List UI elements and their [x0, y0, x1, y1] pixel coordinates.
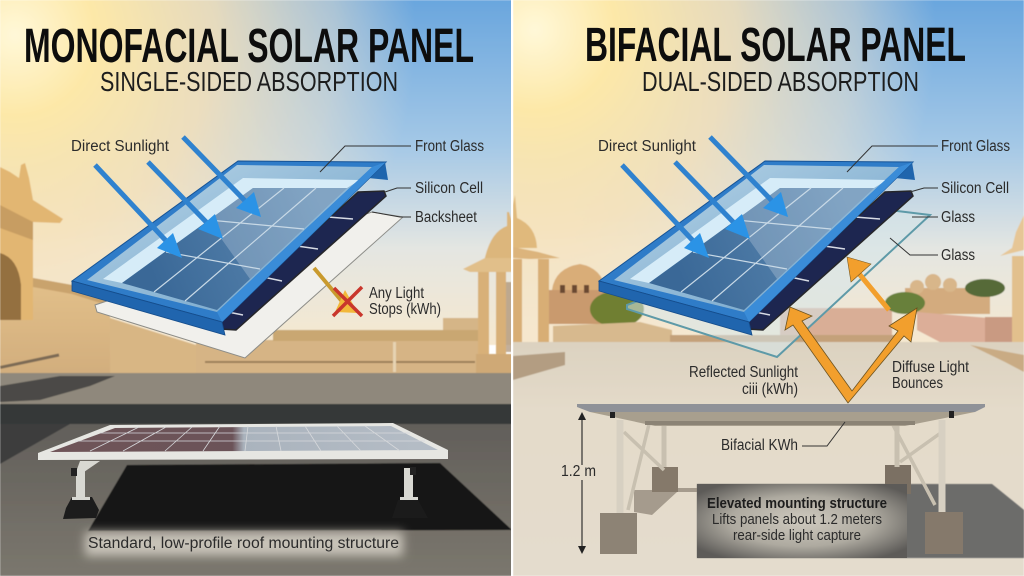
panel: monofacial background scene: [0, 0, 512, 576]
raised structure: bifacial: [577, 404, 985, 554]
label: backsheet: Backsheet: [415, 209, 478, 226]
callout: elevated mounting structure: [697, 484, 907, 558]
callout: standard mounting: [85, 532, 403, 556]
icon: blocked light: [314, 268, 362, 316]
subtitle: bifacial: DUAL-SIDED ABSORPTION: [642, 66, 919, 97]
label: diffuse light bounces: Bounces: [892, 375, 943, 392]
label: glass rear 1: [912, 209, 975, 226]
solar module: [38, 423, 448, 460]
label: any light stops: Stops (kWh): [369, 301, 441, 318]
exploded diagram: bifacial panel: [599, 137, 930, 357]
label: any light stops: [369, 285, 441, 318]
concrete blocks rear: [652, 467, 678, 492]
rear glass: [627, 210, 930, 357]
distant palace left: [552, 264, 610, 322]
arrow: direct sunlight 3: [183, 137, 261, 217]
label: bifacial kwh: [721, 422, 845, 454]
feet: [63, 497, 99, 519]
pavilion: [484, 212, 512, 262]
arrow: direct sunlight 1: [622, 165, 709, 258]
exploded diagram: monofacial panel: [72, 137, 403, 358]
subtitle: monofacial: SINGLE-SIDED ABSORPTION: [100, 66, 398, 97]
planter: [553, 322, 672, 351]
label: reflected sunlight: [689, 364, 799, 398]
label: glass rear 1: Glass: [941, 209, 975, 226]
callout: standard mounting: Standard, low-profile roof mounting structure: [88, 535, 399, 552]
roof mount: monofacial: [38, 423, 448, 519]
back wall: [780, 308, 892, 336]
label: glass rear 2: [890, 238, 975, 264]
arrow: direct sunlight 2: [148, 162, 223, 239]
dimension: 1.2 m height: 1.2 m: [561, 463, 596, 480]
callout: elevated mounting structure: rear-side light capture: [733, 528, 861, 544]
label: bifacial kwh: Bifacial KWh: [721, 437, 798, 454]
rails: [590, 412, 975, 426]
front glass frame: [599, 161, 915, 335]
backsheet: [95, 212, 403, 358]
title: monofacial: MONOFACIAL SOLAR PANEL: [24, 20, 474, 73]
legs and braces: [620, 420, 942, 515]
label: reflected sunlight: ciii (kWh): [742, 381, 798, 398]
callout: elevated mounting structure: Elevated mounting structure: [707, 496, 887, 512]
concrete blocks front: [600, 513, 637, 554]
left pavilion: [513, 195, 537, 248]
label: front glass: [847, 138, 1010, 172]
front glass frame: [72, 161, 388, 335]
callout shadow under raised panel: [697, 484, 1024, 558]
label: direct sunlight: Direct Sunlight: [71, 138, 170, 155]
label: backsheet: [372, 209, 478, 226]
divider: [511, 0, 513, 576]
right tower: [1000, 215, 1024, 256]
label: any light stops: Any Light: [369, 285, 425, 302]
arrow: reflected bounce: [785, 257, 917, 403]
label: silicon cell: Silicon Cell: [941, 180, 1009, 197]
panel: bifacial background scene: [513, 0, 1024, 576]
bush: [590, 291, 644, 327]
label: reflected sunlight: Reflected Sunlight: [689, 364, 799, 381]
panel edge: [577, 404, 985, 412]
label: direct sunlight: Direct Sunlight: [598, 138, 697, 155]
label: glass rear 2: Glass: [941, 247, 975, 264]
label: silicon cell: Silicon Cell: [415, 180, 483, 197]
arrow: direct sunlight 2: [675, 162, 750, 239]
silicon cell layer: [748, 191, 913, 330]
label: diffuse light bounces: [892, 359, 970, 392]
distant palace right: [905, 288, 990, 314]
label: silicon cell: [910, 180, 1009, 197]
silicon cell layer: [221, 191, 386, 330]
legs: [72, 461, 418, 500]
label: front glass: Front Glass: [941, 138, 1010, 155]
arrow: direct sunlight 3: [710, 137, 788, 217]
label: diffuse light bounces: Diffuse Light: [892, 359, 970, 376]
pink railing: [917, 312, 1012, 352]
callout: elevated mounting structure: Lifts panels about 1.2 meters: [712, 512, 882, 528]
label: silicon cell: [385, 180, 483, 197]
dimension: 1.2 m height: [561, 412, 596, 554]
label: front glass: Front Glass: [415, 138, 484, 155]
arrow: direct sunlight 1: [95, 165, 182, 258]
label: front glass: [320, 138, 484, 172]
